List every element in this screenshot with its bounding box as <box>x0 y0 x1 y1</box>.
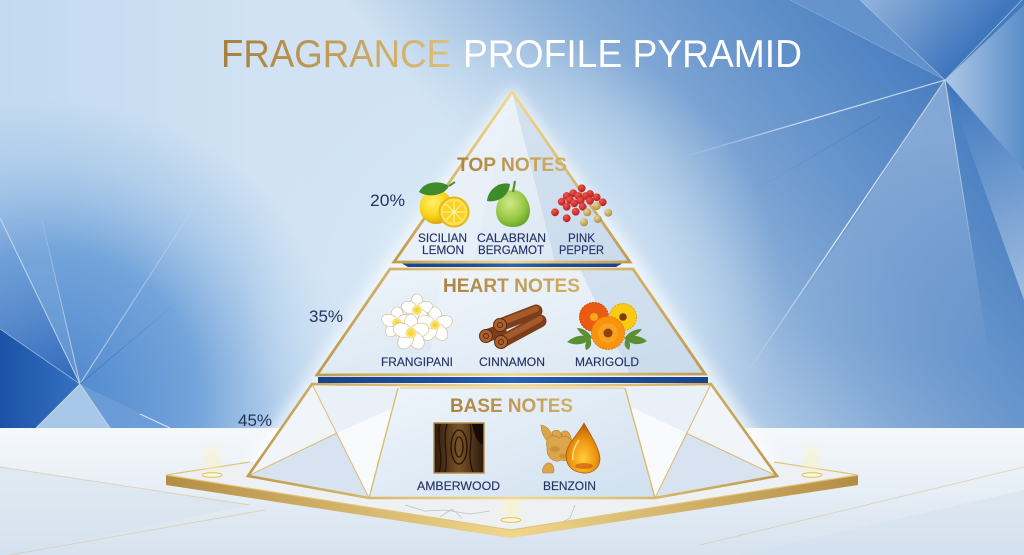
35 percent: 35% <box>309 308 343 326</box>
flower left <box>380 307 414 339</box>
marble veins <box>405 505 575 528</box>
heart notes heading: HEART NOTES <box>443 275 580 297</box>
flower back <box>400 294 434 326</box>
marigold yellow <box>610 304 636 330</box>
marble platform <box>166 446 858 538</box>
flower right <box>416 307 454 343</box>
icon: cinnamon <box>480 309 540 348</box>
top tier <box>394 92 630 262</box>
title <box>221 33 802 76</box>
calabrian bergamot label <box>477 233 546 257</box>
background <box>0 0 1024 428</box>
floor <box>0 428 1024 555</box>
calabrian bergamot label: BERGAMOT <box>478 245 544 257</box>
45 percent: 45% <box>238 412 272 430</box>
blue band lower <box>318 377 708 383</box>
calabrian bergamot label: CALABRIAN <box>477 233 546 245</box>
centre glow <box>0 0 1024 428</box>
marigold leaves <box>567 328 647 350</box>
base notes heading: BASE NOTES <box>450 395 573 417</box>
icon: calabrian bergamot <box>487 181 530 227</box>
right facets <box>680 0 1024 428</box>
top tier frame <box>394 92 630 262</box>
platform right side <box>511 475 858 538</box>
platform rim <box>166 462 858 530</box>
frangipani label: FRANGIPANI <box>381 357 453 369</box>
percentages <box>238 192 405 430</box>
flower front <box>391 314 431 352</box>
platform top <box>166 455 858 530</box>
top right blue wash <box>0 0 1024 428</box>
base tier frame <box>248 384 777 498</box>
title words white: PROFILE PYRAMID <box>463 33 802 76</box>
cinnamon label: CINNAMON <box>479 357 545 369</box>
pyramid glow <box>235 85 790 480</box>
base tier centre panel <box>369 388 655 498</box>
base tier right facets <box>625 384 777 498</box>
left blue wash <box>0 0 360 428</box>
base tier <box>248 384 777 498</box>
heart tier panel <box>317 269 705 375</box>
platform lights <box>202 446 822 522</box>
sicilian lemon label: LEMON <box>422 245 464 257</box>
pink pepper label <box>559 233 604 257</box>
base facet lines <box>248 384 777 498</box>
sicilian lemon label: SICILIAN <box>418 233 467 245</box>
pink pepper label: PEPPER <box>559 245 604 257</box>
amberwood label: AMBERWOOD <box>417 481 500 493</box>
icon: pink pepper <box>551 184 612 226</box>
top notes heading: TOP NOTES <box>457 154 567 176</box>
platform left side <box>166 475 511 538</box>
benzoin label: BENZOIN <box>543 481 596 493</box>
icon: frangipani <box>380 294 454 352</box>
base tier left facets <box>248 384 398 498</box>
pink pepper label: PINK <box>568 233 595 245</box>
20 percent: 20% <box>370 192 405 210</box>
icon: benzoin <box>541 423 600 473</box>
marigold label: MARIGOLD <box>575 357 639 369</box>
icon: marigold <box>567 302 647 350</box>
marigold red <box>580 302 608 332</box>
left facets <box>0 190 205 428</box>
icon: amberwood <box>434 423 484 473</box>
marigold orange <box>592 316 624 350</box>
sicilian lemon label <box>418 233 467 257</box>
icon: sicilian lemon <box>419 182 468 226</box>
blue band upper <box>402 264 622 267</box>
top tier panel <box>394 92 630 262</box>
heart tier <box>317 269 705 375</box>
heart tier frame <box>317 269 705 375</box>
title word gold: FRAGRANCE <box>221 33 451 76</box>
